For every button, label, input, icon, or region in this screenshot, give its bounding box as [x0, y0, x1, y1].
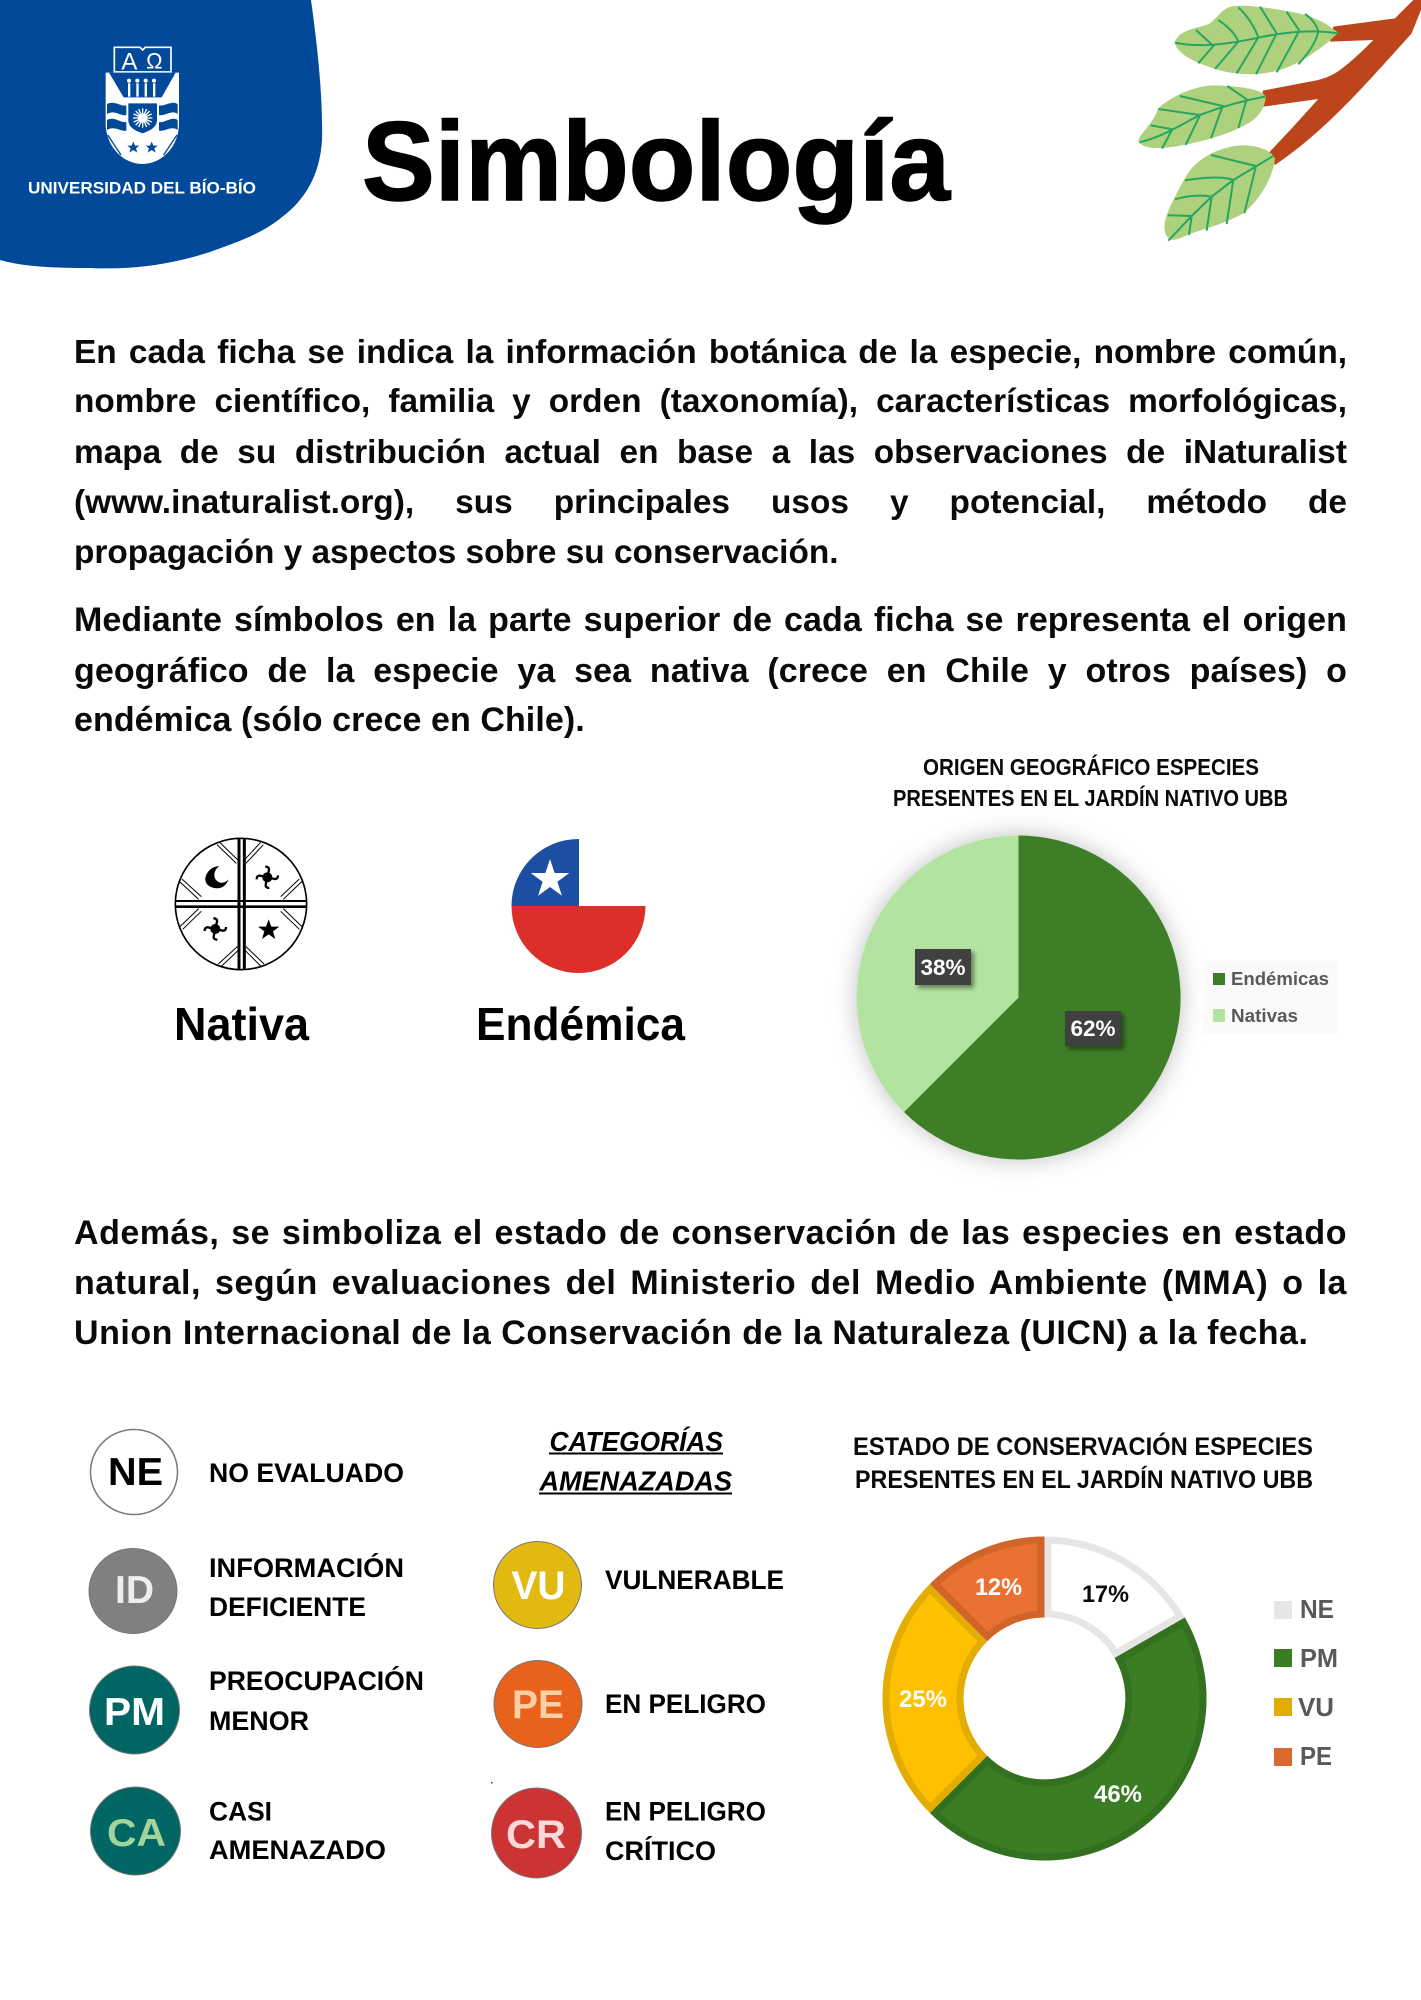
category badge: ID — [89, 1548, 177, 1634]
icon: university shield — [106, 47, 179, 164]
chart title: origen geográfico: PRESENTES EN EL JARDÍN NATIVO UBB — [893, 784, 1288, 811]
category label: casi amenazado: AMENAZADO — [209, 1835, 386, 1865]
chart title: estado de conservación: PRESENTES EN EL JARDÍN NATIVO UBB — [855, 1465, 1313, 1494]
text block: intro paragraph: propagación y aspectos sobre su conservación. — [74, 534, 839, 571]
category label: casi amenazado — [209, 1796, 386, 1865]
legend: estado de conservación: PM — [1300, 1643, 1338, 1673]
chart title: estado de conservación — [853, 1431, 1313, 1494]
text block: intro paragraph: (www.inaturalist.org), sus principales usos y potencial, método de — [74, 484, 1347, 521]
legend: estado de conservación: PE — [1300, 1741, 1332, 1771]
heading: categorías amenazadas: AMENAZADAS — [539, 1466, 732, 1496]
data labels: 17% — [1082, 1581, 1129, 1608]
category label: preocupación menor — [209, 1665, 424, 1736]
legend: estado de conservación — [1274, 1594, 1338, 1771]
category label: preocupación menor: PREOCUPACIÓN — [209, 1665, 424, 1696]
university name: UNIVERSIDAD DEL BÍO-BÍO — [28, 178, 256, 198]
category badge: CR: CR — [506, 1813, 566, 1857]
legend: origen geográfico: Endémicas — [1231, 969, 1329, 989]
heading: categorías amenazadas — [539, 1426, 732, 1496]
category label: información deficiente: INFORMACIÓN — [209, 1552, 404, 1583]
category badge: NE: NE — [108, 1451, 163, 1494]
text block: conservation paragraph — [74, 1214, 1347, 1352]
category label: en peligro crítico: EN PELIGRO — [605, 1796, 766, 1826]
category badge: VU — [494, 1542, 582, 1628]
category badge: VU: VU — [512, 1564, 566, 1608]
pie chart: origen geográfico — [857, 835, 1181, 1159]
data label: 62% — [1065, 1011, 1121, 1046]
text block: origin paragraph: Mediante símbolos en la parte superior de cada ficha se representa el origen — [74, 601, 1347, 639]
title: Simbología — [362, 99, 951, 224]
category badge: CA — [90, 1787, 180, 1875]
data labels — [899, 1574, 1142, 1808]
icon: Endémica Chilean flag — [511, 839, 647, 974]
icon: university shield: Ω — [146, 49, 163, 74]
label: Nativa: Nativa — [174, 998, 309, 1050]
category badge: NE — [90, 1430, 178, 1514]
text block: intro paragraph: mapa de su distribución actual en base a las observaciones de iNaturalist — [74, 434, 1347, 471]
category label: información deficiente: DEFICIENTE — [209, 1592, 366, 1622]
icon: university shield: Α — [121, 48, 137, 75]
data label: 38%: 38% — [920, 955, 966, 980]
category label: información deficiente — [209, 1552, 404, 1622]
category badge: CR — [491, 1782, 582, 1878]
category label: vulnerable: VULNERABLE — [605, 1565, 784, 1595]
data labels: 25% — [899, 1686, 947, 1713]
panel: university logo blob — [0, 0, 322, 268]
legend: estado de conservación: NE — [1300, 1594, 1334, 1624]
category label: preocupación menor: MENOR — [209, 1706, 309, 1736]
category label: en peligro: EN PELIGRO — [605, 1689, 766, 1719]
data label: 38% — [915, 949, 971, 985]
category label: en peligro crítico — [605, 1796, 766, 1866]
text block: intro paragraph — [74, 334, 1347, 571]
category badge: PM: PM — [104, 1691, 165, 1734]
chart title: estado de conservación: ESTADO DE CONSERVACIÓN ESPECIES — [853, 1431, 1313, 1461]
legend: estado de conservación: VU — [1298, 1692, 1334, 1722]
category label: casi amenazado: CASI — [209, 1796, 272, 1826]
donut chart: estado de conservación — [883, 1536, 1207, 1861]
chart title: origen geográfico — [893, 753, 1288, 811]
text block: origin paragraph: geográfico de la especie ya sea nativa (crece en Chile y otros países) o — [74, 652, 1347, 690]
legend: origen geográfico — [1203, 961, 1338, 1034]
legend: origen geográfico: Nativas — [1231, 1006, 1298, 1026]
icon: Nativa Mapuche emblem — [175, 838, 307, 970]
category badge: PE — [494, 1660, 582, 1748]
text block: origin paragraph — [74, 601, 1347, 739]
label: Endémica: Endémica — [476, 998, 685, 1050]
text block: origin paragraph: endémica (sólo crece en Chile). — [74, 701, 585, 739]
category label: no evaluado: NO EVALUADO — [209, 1458, 404, 1488]
text block: intro paragraph: En cada ficha se indica la información botánica de la especie, nombre común, — [74, 334, 1347, 371]
text block: conservation paragraph: Además, se simboliza el estado de conservación de las especies en estado — [74, 1214, 1347, 1252]
icon: branch with leaves — [1138, 0, 1421, 241]
heading: categorías amenazadas: CATEGORÍAS — [550, 1426, 723, 1457]
category badge: PE: PE — [512, 1683, 564, 1727]
data labels: 46% — [1094, 1781, 1142, 1808]
category badge: PM — [90, 1666, 180, 1754]
text block: conservation paragraph: natural, según evaluaciones del Ministerio del Medio Ambiente (MMA) o la — [74, 1264, 1347, 1302]
text block: intro paragraph: nombre científico, familia y orden (taxonomía), características morfológicas, — [74, 383, 1347, 420]
data label: 62%: 62% — [1070, 1016, 1116, 1041]
category badge: ID: ID — [115, 1569, 154, 1612]
category label: en peligro crítico: CRÍTICO — [605, 1835, 716, 1866]
chart title: origen geográfico: ORIGEN GEOGRÁFICO ESPECIES — [923, 753, 1259, 780]
category badge: CA: CA — [107, 1812, 166, 1855]
text block: conservation paragraph: Union Internacional de la Conservación de la Naturaleza (UICN) a la fecha. — [74, 1314, 1308, 1352]
data labels: 12% — [975, 1574, 1022, 1601]
